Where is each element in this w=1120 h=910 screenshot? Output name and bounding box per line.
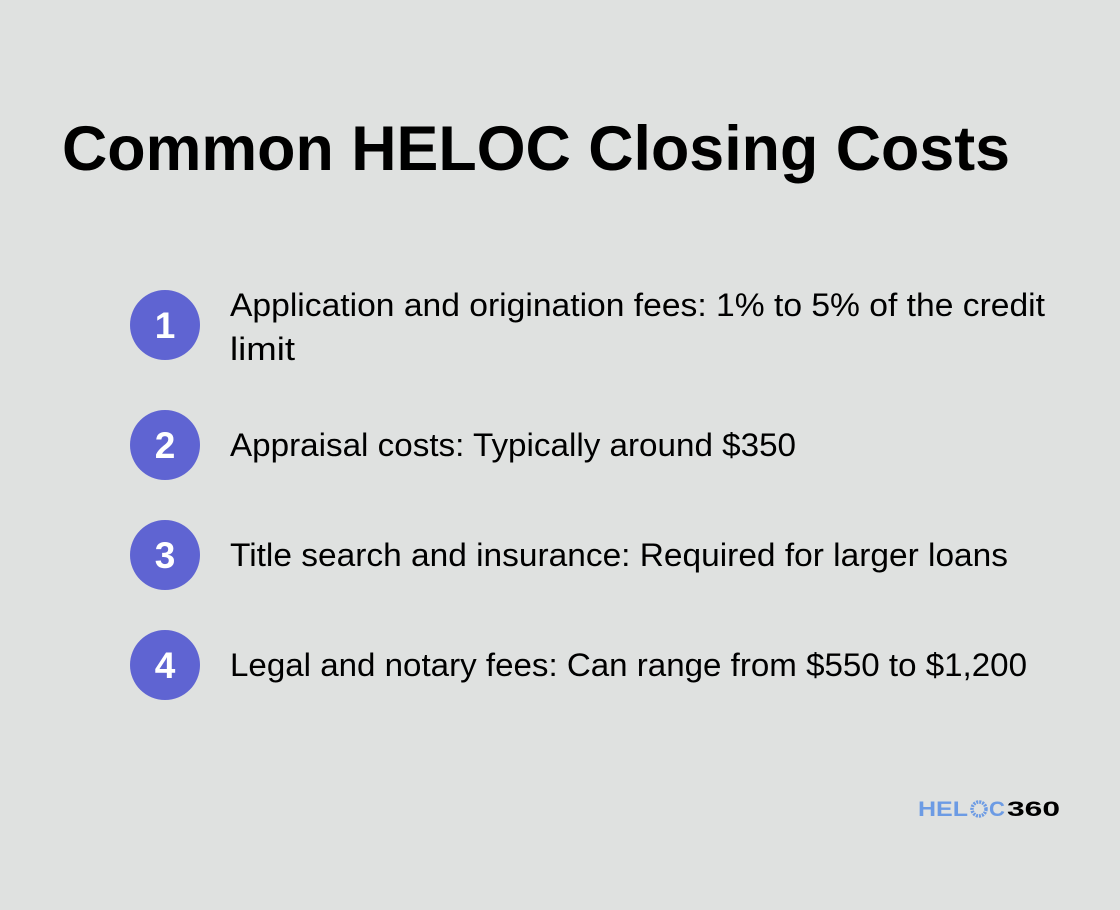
list item 2: 2 [155, 425, 175, 466]
list item 2 [130, 410, 796, 480]
list item 1: limit [230, 331, 295, 367]
list item 4: 4 [155, 645, 176, 686]
logo: HELOC360: C [989, 798, 1005, 821]
list item 1: Application and origination fees: 1% to 5% of the credit [230, 287, 1045, 323]
title: Common HELOC Closing Costs [62, 114, 1010, 184]
list item 1 [130, 287, 1045, 367]
list item 4 [130, 630, 1027, 700]
list item 1: 1 [155, 305, 175, 346]
logo: HELOC360: HEL [918, 798, 968, 821]
icon: logo swirl O [972, 802, 986, 816]
logo: HELOC360 [918, 798, 1060, 821]
list item 3 [130, 520, 1008, 590]
list item 3: 3 [155, 535, 175, 576]
list item 2: Appraisal costs: Typically around $350 [230, 427, 796, 463]
list item 4: Legal and notary fees: Can range from $550 to $1,200 [230, 647, 1027, 683]
logo: HELOC360: 360 [1007, 798, 1060, 821]
list item 3: Title search and insurance: Required for larger loans [230, 537, 1008, 573]
